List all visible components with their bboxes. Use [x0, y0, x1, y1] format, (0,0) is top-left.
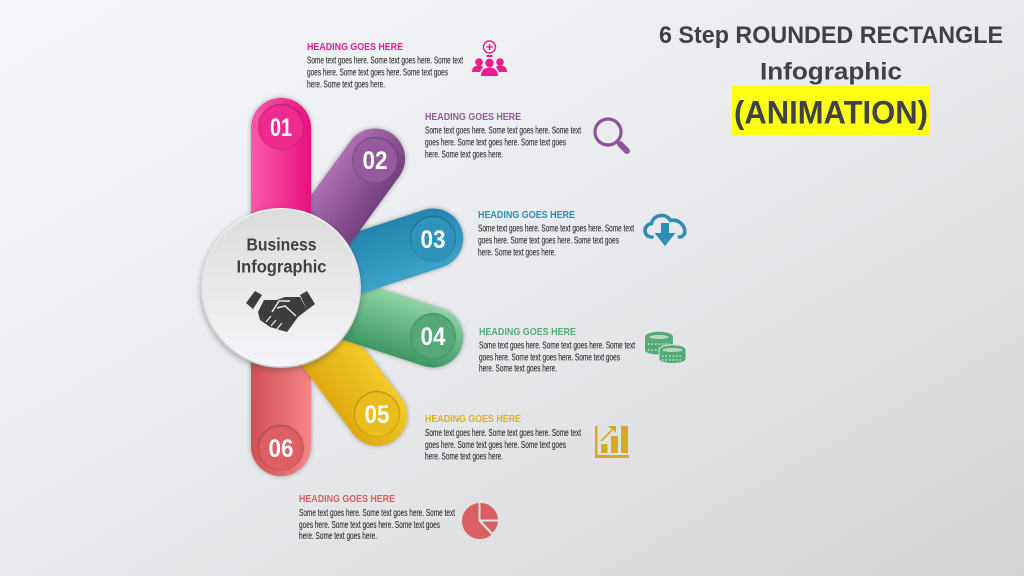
- icon: team with lightbulb: [472, 41, 507, 76]
- step 1 text: HEADING GOES HERE: [307, 42, 403, 53]
- step 4 text: [479, 327, 635, 374]
- center circle: [200, 208, 362, 370]
- step 4 text: HEADING GOES HERE: [479, 327, 576, 338]
- pill 06 red: [251, 288, 311, 476]
- step 3 text: here. Some text goes here.: [478, 248, 556, 258]
- step 2 text: here. Some text goes here.: [425, 150, 503, 160]
- pill 04 green: 04: [420, 323, 446, 351]
- pill 05 yellow: [257, 270, 419, 458]
- step 6 text: goes here. Some text goes here. Some text goes: [299, 520, 440, 531]
- pill 02 purple: 02: [362, 147, 388, 175]
- pill 04 green: [272, 259, 471, 375]
- step 4 text: goes here. Some text goes here. Some text goes: [479, 352, 620, 364]
- title: [659, 22, 1003, 135]
- step 3 text: goes here. Some text goes here. Some text goes: [478, 236, 619, 246]
- center circle: Business: [246, 234, 317, 254]
- step 3 text: Some text goes here. Some text goes here. Some text: [478, 224, 634, 234]
- title: 6 Step ROUNDED RECTANGLE: [659, 22, 1003, 49]
- step 6 text: here. Some text goes here.: [299, 531, 377, 542]
- step 3 text: [478, 210, 634, 258]
- step 4 text: Some text goes here. Some text goes here. Some text: [479, 340, 635, 352]
- title: Infographic: [760, 58, 902, 86]
- icon: magnifier: [595, 119, 627, 151]
- pill 03 blue: 03: [420, 226, 446, 254]
- pill 01 pink: [251, 98, 311, 288]
- step 5 text: here. Some text goes here.: [425, 452, 503, 462]
- step 1 text: goes here. Some text goes here. Some text goes: [307, 68, 448, 78]
- center circle: Infographic: [236, 256, 327, 276]
- step 5 text: [425, 414, 581, 462]
- step 1 text: Some text goes here. Some text goes here. Some text: [307, 56, 463, 66]
- title: (ANIMATION): [734, 94, 928, 130]
- step 4 text: here. Some text goes here.: [479, 364, 557, 374]
- pill 06 red: 06: [268, 435, 294, 463]
- step 6 text: Some text goes here. Some text goes here. Some text: [299, 508, 455, 519]
- icon: coins: [645, 332, 686, 364]
- icon: bar chart: [595, 426, 629, 458]
- step 2 text: [425, 112, 581, 160]
- step 2 text: goes here. Some text goes here. Some text goes: [425, 138, 566, 148]
- pill 02 purple: [257, 117, 417, 306]
- icon: pie chart: [462, 503, 498, 539]
- step 2 text: Some text goes here. Some text goes here. Some text: [425, 126, 581, 136]
- step 3 text: HEADING GOES HERE: [478, 210, 575, 221]
- step 5 text: Some text goes here. Some text goes here. Some text: [425, 428, 581, 439]
- step 5 text: HEADING GOES HERE: [425, 414, 521, 425]
- step 6 text: [299, 494, 455, 542]
- step 1 text: here. Some text goes here.: [307, 80, 385, 90]
- pill 01 pink: 01: [270, 114, 292, 142]
- step 5 text: goes here. Some text goes here. Some text goes: [425, 440, 566, 451]
- icon: cloud download: [645, 215, 685, 246]
- pill 03 blue: [272, 201, 471, 317]
- icon: handshake: [246, 291, 315, 332]
- step 6 text: HEADING GOES HERE: [299, 494, 395, 505]
- pill 05 yellow: 05: [364, 401, 390, 429]
- step 2 text: HEADING GOES HERE: [425, 112, 521, 123]
- step 1 text: [307, 42, 463, 90]
